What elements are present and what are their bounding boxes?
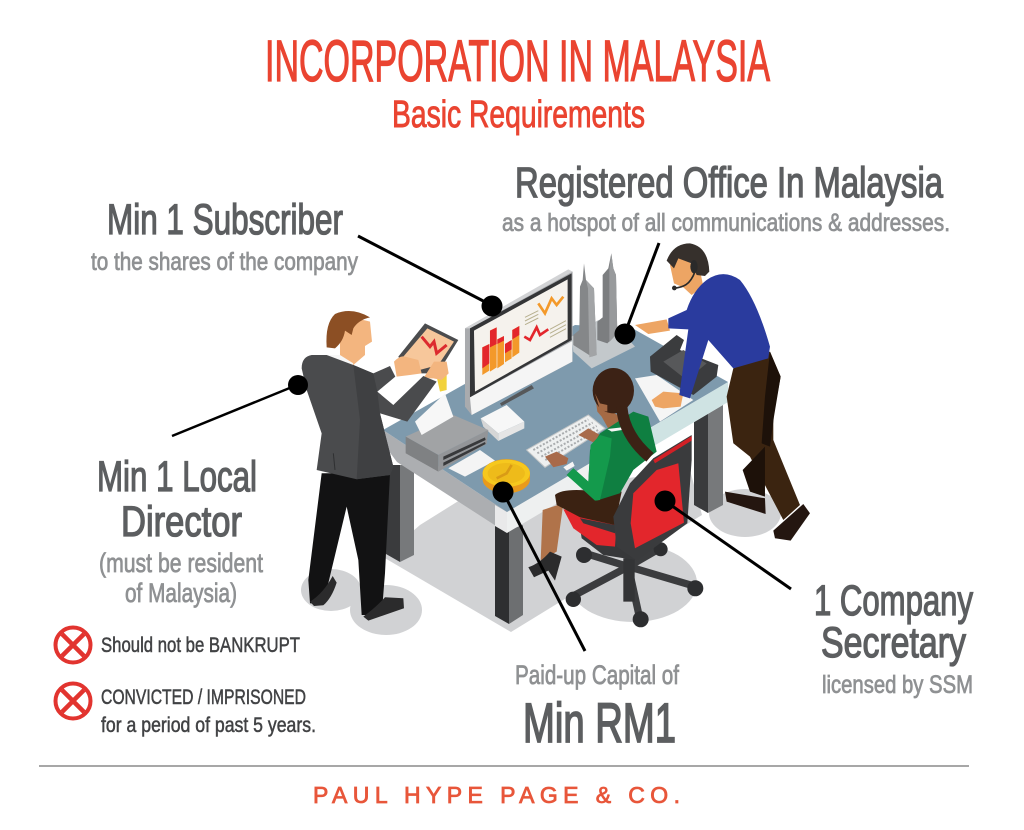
title: Basic Requirements	[392, 94, 645, 136]
leader line and dot: subscriber	[358, 236, 502, 316]
label: local director: (must be resident	[99, 548, 263, 578]
illustration: office desk scene	[301, 243, 810, 635]
label: subscriber: Min 1 Subscriber	[107, 196, 343, 244]
text: bankrupt condition: Should not be BANKRUPT	[101, 634, 300, 657]
footer: firm name: PAUL HYPE PAGE & CO.	[313, 782, 680, 808]
label: local director: Min 1 Local	[97, 453, 257, 501]
label: company secretary: Secretary	[821, 619, 966, 667]
desk phone and paper	[635, 335, 718, 422]
monitor	[465, 269, 573, 415]
icon: not convicted cross	[56, 684, 90, 718]
label: local director: of Malaysia)	[125, 578, 237, 608]
leader line and dot: paid-up capital	[492, 482, 585, 651]
label: paid-up capital	[515, 660, 679, 754]
office chair base and seat	[563, 509, 703, 627]
leader line and dot: registered office	[614, 243, 659, 344]
label: paid-up capital: Paid-up Capital of	[515, 660, 679, 690]
leader line and dot: company secretary	[654, 490, 791, 589]
label: subscriber: to the shares of the company	[91, 248, 358, 276]
desk legs	[386, 400, 723, 624]
text: conviction condition: for a period of past 5 years.	[101, 714, 316, 737]
title	[265, 29, 770, 136]
office chair back	[613, 435, 692, 561]
bar chart on screen	[482, 326, 519, 375]
standing man with headset	[635, 243, 810, 541]
text: conviction condition: CONVICTED / IMPRISONED	[101, 686, 306, 709]
label: local director: Director	[121, 498, 242, 546]
desk	[383, 325, 728, 533]
man with tablet	[302, 311, 458, 621]
keyboard	[527, 415, 605, 467]
woman at keyboard	[528, 368, 657, 581]
label: company secretary: licensed by SSM	[822, 671, 973, 699]
label: company secretary	[814, 577, 973, 699]
label: paid-up capital: Min RM1	[523, 691, 676, 754]
label: registered office: as a hotspot of all communications & addresses.	[502, 209, 950, 237]
tablet paper, printer, mat	[406, 393, 524, 477]
label: registered office	[502, 159, 950, 237]
label: subscriber	[91, 196, 358, 276]
floor shadows	[301, 470, 781, 635]
line charts on screen	[524, 297, 566, 340]
leader line and dot: local director	[172, 375, 308, 436]
coin	[483, 459, 530, 493]
label: local director	[97, 453, 263, 608]
twin towers model	[572, 253, 635, 368]
icon: not bankrupt cross	[56, 628, 90, 662]
text: conviction condition	[101, 686, 316, 737]
